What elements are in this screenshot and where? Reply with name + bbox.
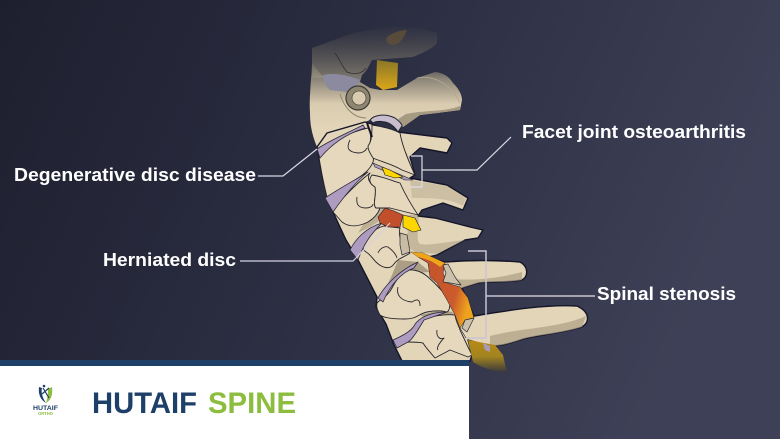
disc C3-C4 xyxy=(325,172,368,212)
discs xyxy=(317,125,447,348)
logo xyxy=(33,385,58,416)
brand title xyxy=(92,387,296,420)
C7 body xyxy=(408,315,472,358)
label: facet joint osteoarthritis: Facet joint osteoarthritis xyxy=(522,122,746,142)
facet C5 xyxy=(400,233,410,255)
disc C2-C3 xyxy=(317,125,365,158)
spine illustration xyxy=(310,27,587,373)
leader lines xyxy=(240,137,595,338)
brand title: SPINE: SPINE xyxy=(208,387,296,420)
leader: degenerative disc disease xyxy=(258,149,317,176)
leader: herniated disc xyxy=(240,223,390,261)
leader: facet joint osteoarthritis xyxy=(410,137,511,187)
disc C5-C6 xyxy=(378,262,418,302)
C4 arch xyxy=(370,175,418,215)
footer panel xyxy=(0,366,469,439)
label: degenerative disc disease: Degenerative disc disease xyxy=(14,165,256,185)
herniated disc xyxy=(378,208,403,227)
purple membrane xyxy=(483,343,490,352)
skull base xyxy=(312,27,437,82)
label: herniated disc: Herniated disc xyxy=(103,250,236,270)
leader: spinal stenosis xyxy=(467,251,595,338)
C3 arch xyxy=(368,125,415,175)
disc C6-C7 xyxy=(393,312,447,348)
logo wordmark: HUTAIF xyxy=(33,406,58,412)
atlas details xyxy=(323,74,460,132)
vertebra outlines xyxy=(318,125,472,358)
inner contours xyxy=(348,123,444,350)
disc C4-C5 xyxy=(350,223,382,260)
C6 body xyxy=(377,270,450,319)
yellow cord segment xyxy=(403,215,421,232)
C1 atlas xyxy=(310,63,462,147)
logo: ORTHO xyxy=(38,411,53,416)
cord upper xyxy=(376,60,398,90)
brand title: HUTAIF: HUTAIF xyxy=(92,387,197,420)
cervical column base xyxy=(317,122,587,361)
stenosis xyxy=(411,252,474,338)
label: spinal stenosis: Spinal stenosis xyxy=(597,284,736,304)
C3 body xyxy=(318,128,374,197)
C4 body xyxy=(333,173,380,226)
C5 body xyxy=(363,226,410,268)
logo icon xyxy=(39,385,52,403)
cord lower xyxy=(468,340,507,373)
tan shadows between bones xyxy=(358,150,586,346)
footer band xyxy=(0,360,469,366)
stenosis facets xyxy=(443,264,461,285)
degenerated facet: yellow xyxy=(373,163,413,180)
